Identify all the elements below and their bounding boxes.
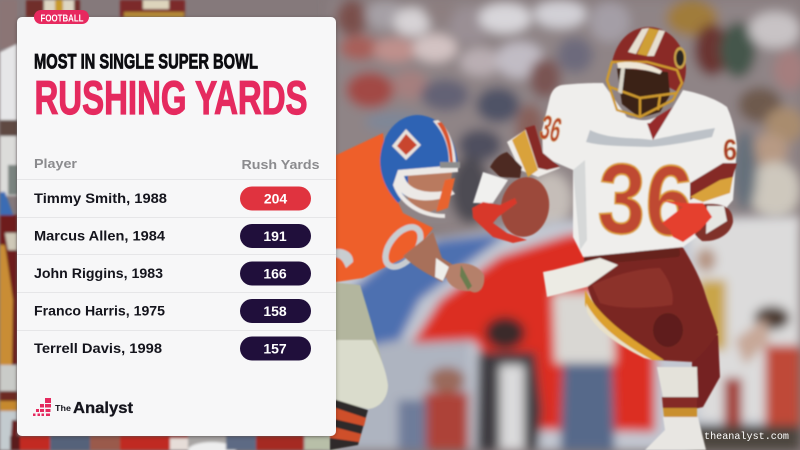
defender pants [330,282,388,409]
row: Franco Harris: Franco Harris, 1975 [34,304,166,318]
sleeve stripes [507,125,560,177]
shin behind [690,335,720,410]
row: Franco Harris: 158 [263,303,287,319]
row: John Riggins: John Riggins, 1983 [34,266,164,281]
row: Timmy Smith [34,186,311,210]
panel: table card [17,10,336,436]
watermark: theanalyst.com [704,431,789,443]
pants [584,246,718,362]
row: John Riggins: 166 [263,266,287,282]
jersey [542,83,737,257]
heading: most in single super bowl: MOST IN SINGLE SUPER BOWL [34,50,258,74]
football [496,173,554,241]
heading: rushing yards: RUSHING YARDS [34,72,308,125]
right shoulder number: 6 [723,134,737,167]
tag: football [34,10,89,24]
defender jersey [330,133,433,283]
right glove [660,200,712,242]
row: Marcus Allen [34,224,311,248]
stadium wall and banner [330,216,800,450]
tag: football: FOOTBALL [40,12,84,24]
right forearm cuff [695,204,733,241]
photo: Washington running back number 36 [472,27,737,450]
helmet brow band [617,62,662,74]
icon: pixel staircase [33,398,51,416]
jersey numeral [379,221,427,273]
column header: rush yards: Rush Yards [242,157,320,172]
row: Timmy Smith: 204 [264,190,287,206]
row: Marcus Allen: 191 [263,228,287,244]
sock and cleat [657,367,698,397]
face mask [607,62,682,117]
logo: The Analyst [33,398,134,417]
defender helmet [380,115,458,203]
shoulder number: 36 [536,108,565,150]
photo: Denver defender [330,115,484,450]
defender arm [403,232,455,282]
row: Franco Harris [34,299,311,323]
face [617,68,670,118]
jersey shading [586,128,715,147]
row: John Riggins [34,262,311,286]
helmet [612,27,686,92]
row: Timmy Smith: Timmy Smith, 1988 [34,191,168,206]
row: Marcus Allen: Marcus Allen, 1984 [34,228,166,244]
defender face [408,172,452,214]
row: Terrell Davis [34,336,311,360]
row: Terrell Davis: 157 [263,340,287,356]
left glove [472,198,527,243]
logo: The Analyst: Analyst [73,400,134,417]
jersey number 36: 36 [596,142,695,258]
row: Terrell Davis: Terrell Davis, 1998 [34,341,163,356]
column header: player: Player [34,156,77,171]
logo: The Analyst: The [55,404,72,413]
towel [543,258,618,297]
running back arm [490,152,522,178]
left edge and top background players [0,0,340,450]
